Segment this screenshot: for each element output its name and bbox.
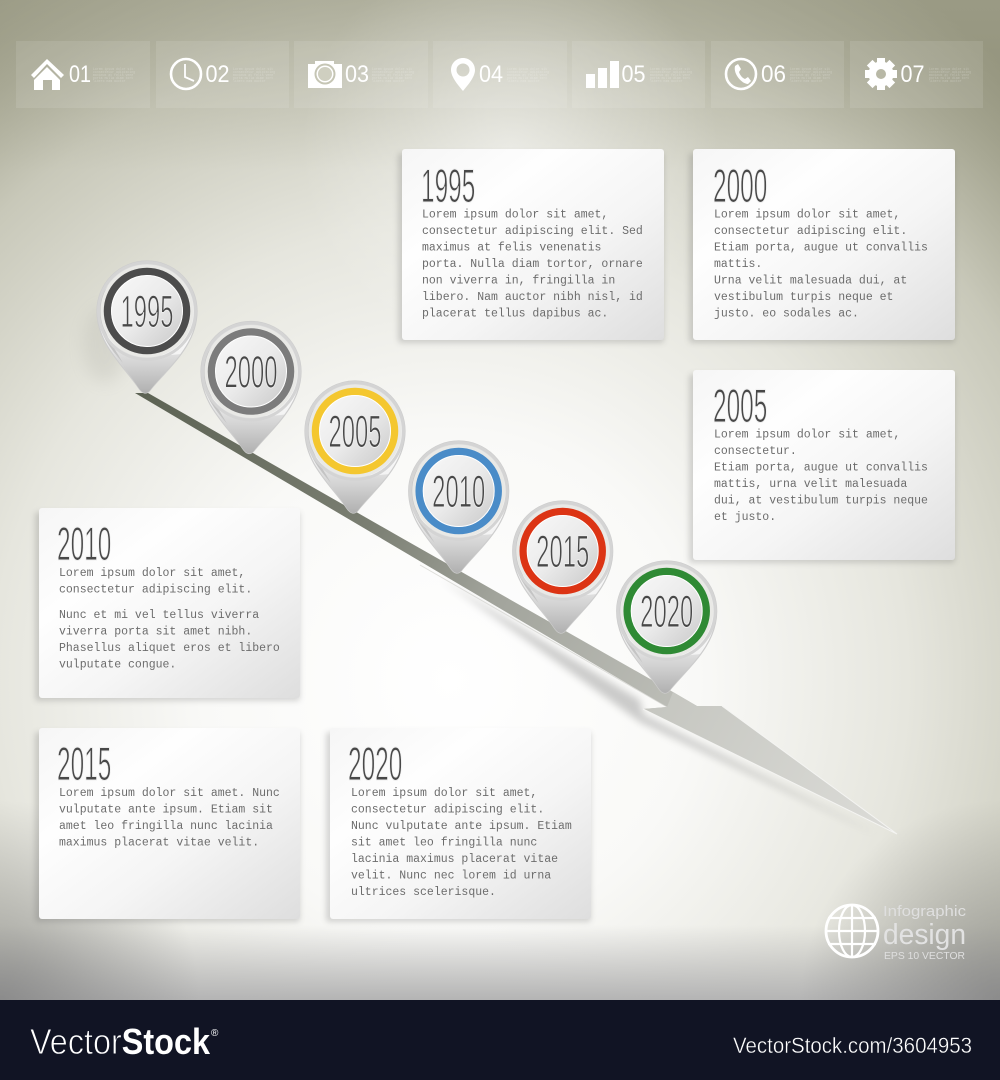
card text 2020: ultrices scelerisque. bbox=[351, 886, 496, 899]
nav tile 06 phone: porta nulla diam tort bbox=[790, 76, 830, 80]
pin 2015: 2015 bbox=[536, 526, 589, 577]
nav tile 04 location pin: 04 bbox=[479, 61, 503, 88]
nav tile 05 bar chart: maximus at felis vene bbox=[650, 73, 690, 77]
card text 1995: Lorem ipsum dolor sit amet, bbox=[422, 208, 608, 222]
nav tile 02 clock bbox=[156, 41, 289, 108]
card 1995 bbox=[398, 149, 664, 343]
nav tile 02 clock: Lorem ipsum dolor sit bbox=[233, 67, 273, 71]
card text 2005: consectetur. bbox=[714, 445, 797, 458]
footer bar bbox=[0, 1000, 1000, 1080]
card text 2000: mattis. bbox=[714, 258, 762, 271]
card 2015 bbox=[35, 728, 300, 922]
card heading 2000: 2000 bbox=[713, 159, 767, 212]
card text 1995: placerat tellus dapibus ac. bbox=[422, 308, 608, 320]
nav tile 07 gear: 07 bbox=[900, 61, 924, 88]
nav tile 02 clock: libero nam auctor bbox=[233, 79, 266, 83]
registered mark: ® bbox=[211, 1028, 219, 1039]
nav tile 01 home: 01 bbox=[69, 61, 91, 88]
nav tile 04 location pin bbox=[433, 41, 567, 108]
card text 2010: Lorem ipsum dolor sit amet, bbox=[59, 567, 245, 580]
nav tile 07 gear: porta nulla diam tort bbox=[929, 76, 969, 80]
card text 2005: et justo. bbox=[714, 511, 776, 524]
card text 1995: porta. Nulla diam tortor, ornare bbox=[422, 258, 643, 271]
card text 2010: Phasellus aliquet eros et libero bbox=[59, 642, 280, 655]
card text 2020: consectetur adipiscing elit. bbox=[351, 804, 544, 816]
nav tile 02 clock: maximus at felis vene bbox=[233, 73, 273, 77]
nav tile 03 camera: maximus at felis vene bbox=[372, 73, 412, 77]
pin 2005: 2005 bbox=[328, 406, 382, 457]
nav tile 07 gear: maximus at felis vene bbox=[929, 73, 969, 77]
logo: infographic design bbox=[826, 903, 967, 962]
nav tile 02 clock: consectetur adipiscing bbox=[233, 70, 275, 74]
pin 2020 bbox=[617, 561, 717, 693]
nav tile 03 camera bbox=[294, 41, 428, 108]
card 2000 bbox=[689, 149, 955, 343]
card text 2010: vulputate congue. bbox=[59, 658, 176, 672]
card text 2020: Lorem ipsum dolor sit amet, bbox=[351, 787, 537, 800]
pin 1995: 1995 bbox=[120, 286, 174, 337]
footer url: VectorStock.com/3604953 bbox=[733, 1033, 972, 1058]
nav tile 06 phone: maximus at felis vene bbox=[790, 73, 830, 77]
card text 2000: vestibulum turpis neque et bbox=[714, 291, 893, 304]
pin 2020: 2020 bbox=[640, 586, 693, 637]
nav tile 01 home bbox=[16, 41, 150, 108]
card text 2020: lacinia maximus placerat vitae bbox=[351, 853, 558, 866]
card text 2005: dui, at vestibulum turpis neque bbox=[714, 494, 928, 508]
nav tile 06 phone: Lorem ipsum dolor sit bbox=[790, 67, 830, 71]
logo: infographic design: design bbox=[883, 919, 966, 951]
card text 2015: Lorem ipsum dolor sit amet. Nunc bbox=[59, 787, 280, 800]
card text 2010: consectetur adipiscing elit. bbox=[59, 584, 252, 596]
nav tile 05 bar chart: consectetur adipiscing bbox=[650, 70, 692, 74]
nav tile 06 phone: libero nam auctor bbox=[790, 79, 823, 83]
card text 2000: consectetur adipiscing elit. bbox=[714, 225, 907, 238]
card text 2005: Lorem ipsum dolor sit amet, bbox=[714, 428, 900, 442]
timeline arrow bbox=[135, 393, 897, 836]
nav tile 05 bar chart: 05 bbox=[622, 61, 646, 88]
card text 2000: Lorem ipsum dolor sit amet, bbox=[714, 208, 900, 222]
card text 1995: consectetur adipiscing elit. Sed bbox=[422, 225, 643, 238]
pin 2005 bbox=[305, 381, 405, 513]
pin 2015 bbox=[513, 501, 613, 633]
nav tile 04 location pin: porta nulla diam tort bbox=[507, 76, 547, 80]
nav tile 04 location pin: consectetur adipiscing bbox=[507, 70, 549, 74]
card text 2020: velit. Nunc nec lorem id urna bbox=[351, 870, 551, 882]
card 2005 bbox=[689, 370, 955, 563]
nav tile 06 phone bbox=[711, 41, 844, 108]
nav tile 03 camera: consectetur adipiscing bbox=[372, 70, 414, 74]
nav tile 06 phone: 06 bbox=[761, 61, 786, 88]
card text 1995: libero. Nam auctor nibh nisl, id bbox=[422, 291, 643, 304]
navigation bar bbox=[16, 41, 983, 108]
footer logo: VectorStock bbox=[30, 1021, 211, 1062]
card heading 2010: 2010 bbox=[57, 517, 111, 570]
nav tile 07 gear bbox=[850, 41, 983, 108]
nav tile 02 clock: 02 bbox=[206, 61, 230, 88]
card heading 2015: 2015 bbox=[57, 737, 111, 790]
card heading 1995: 1995 bbox=[421, 159, 475, 212]
card text 2015: maximus placerat vitae velit. bbox=[59, 836, 259, 850]
card text 2010: Nunc et mi vel tellus viverra bbox=[59, 609, 259, 622]
card text 2020: sit amet leo fringilla nunc bbox=[351, 836, 537, 850]
pin 2000 bbox=[201, 322, 301, 454]
card text 1995: maximus at felis venenatis bbox=[422, 242, 601, 254]
pin 2010 bbox=[409, 441, 509, 573]
card text 2020: Nunc vulputate ante ipsum. Etiam bbox=[351, 820, 572, 833]
nav tile 03 camera: Lorem ipsum dolor sit bbox=[372, 67, 412, 71]
card text 2015: amet leo fringilla nunc lacinia bbox=[59, 820, 273, 833]
logo: infographic design: Infographic bbox=[883, 903, 967, 920]
nav tile 04 location pin: maximus at felis vene bbox=[507, 73, 547, 77]
card text 2015: vulputate ante ipsum. Etiam sit bbox=[59, 804, 273, 816]
card text 2000: Urna velit malesuada dui, at bbox=[714, 274, 907, 288]
card text 2005: Etiam porta, augue ut convallis bbox=[714, 462, 928, 474]
pin 2000: 2000 bbox=[224, 346, 278, 397]
card heading 2020: 2020 bbox=[348, 737, 402, 790]
nav tile 01 home: libero nam auctor bbox=[93, 79, 126, 83]
nav tile 04 location pin: libero nam auctor bbox=[507, 79, 540, 83]
card 2010 bbox=[35, 508, 300, 701]
nav tile 06 phone: consectetur adipiscing bbox=[790, 70, 832, 74]
nav tile 01 home: porta nulla diam tort bbox=[93, 76, 133, 80]
nav tile 01 home: consectetur adipiscing bbox=[93, 70, 135, 74]
card heading 2005: 2005 bbox=[713, 379, 767, 432]
icon: globe bbox=[826, 905, 878, 957]
card text 2005: mattis, urna velit malesuada bbox=[714, 478, 907, 491]
pin 1995 bbox=[83, 261, 197, 393]
nav tile 05 bar chart: porta nulla diam tort bbox=[650, 76, 690, 80]
nav tile 01 home: Lorem ipsum dolor sit bbox=[93, 67, 133, 71]
nav tile 04 location pin: Lorem ipsum dolor sit bbox=[507, 67, 547, 71]
card text 2010: viverra porta sit amet nibh. bbox=[59, 626, 252, 638]
nav tile 05 bar chart bbox=[572, 41, 705, 108]
card text 1995: non viverra in, fringilla in bbox=[422, 274, 615, 288]
nav tile 07 gear: Lorem ipsum dolor sit bbox=[929, 67, 969, 71]
logo: infographic design: EPS 10 VECTOR bbox=[884, 950, 965, 962]
pin 2010: 2010 bbox=[432, 466, 485, 517]
nav tile 01 home: maximus at felis vene bbox=[93, 73, 133, 77]
nav tile 02 clock: porta nulla diam tort bbox=[233, 76, 273, 80]
card text 2000: Etiam porta, augue ut convallis bbox=[714, 242, 928, 254]
nav tile 05 bar chart: Lorem ipsum dolor sit bbox=[650, 67, 690, 71]
nav tile 03 camera: porta nulla diam tort bbox=[372, 76, 412, 80]
nav tile 07 gear: libero nam auctor bbox=[929, 79, 962, 83]
card text 2000: justo. eo sodales ac. bbox=[714, 308, 859, 320]
card 2020 bbox=[326, 728, 591, 922]
nav tile 07 gear: consectetur adipiscing bbox=[929, 70, 971, 74]
nav tile 03 camera: 03 bbox=[345, 61, 369, 88]
nav tile 05 bar chart: libero nam auctor bbox=[650, 79, 683, 83]
nav tile 03 camera: libero nam auctor bbox=[372, 79, 405, 83]
